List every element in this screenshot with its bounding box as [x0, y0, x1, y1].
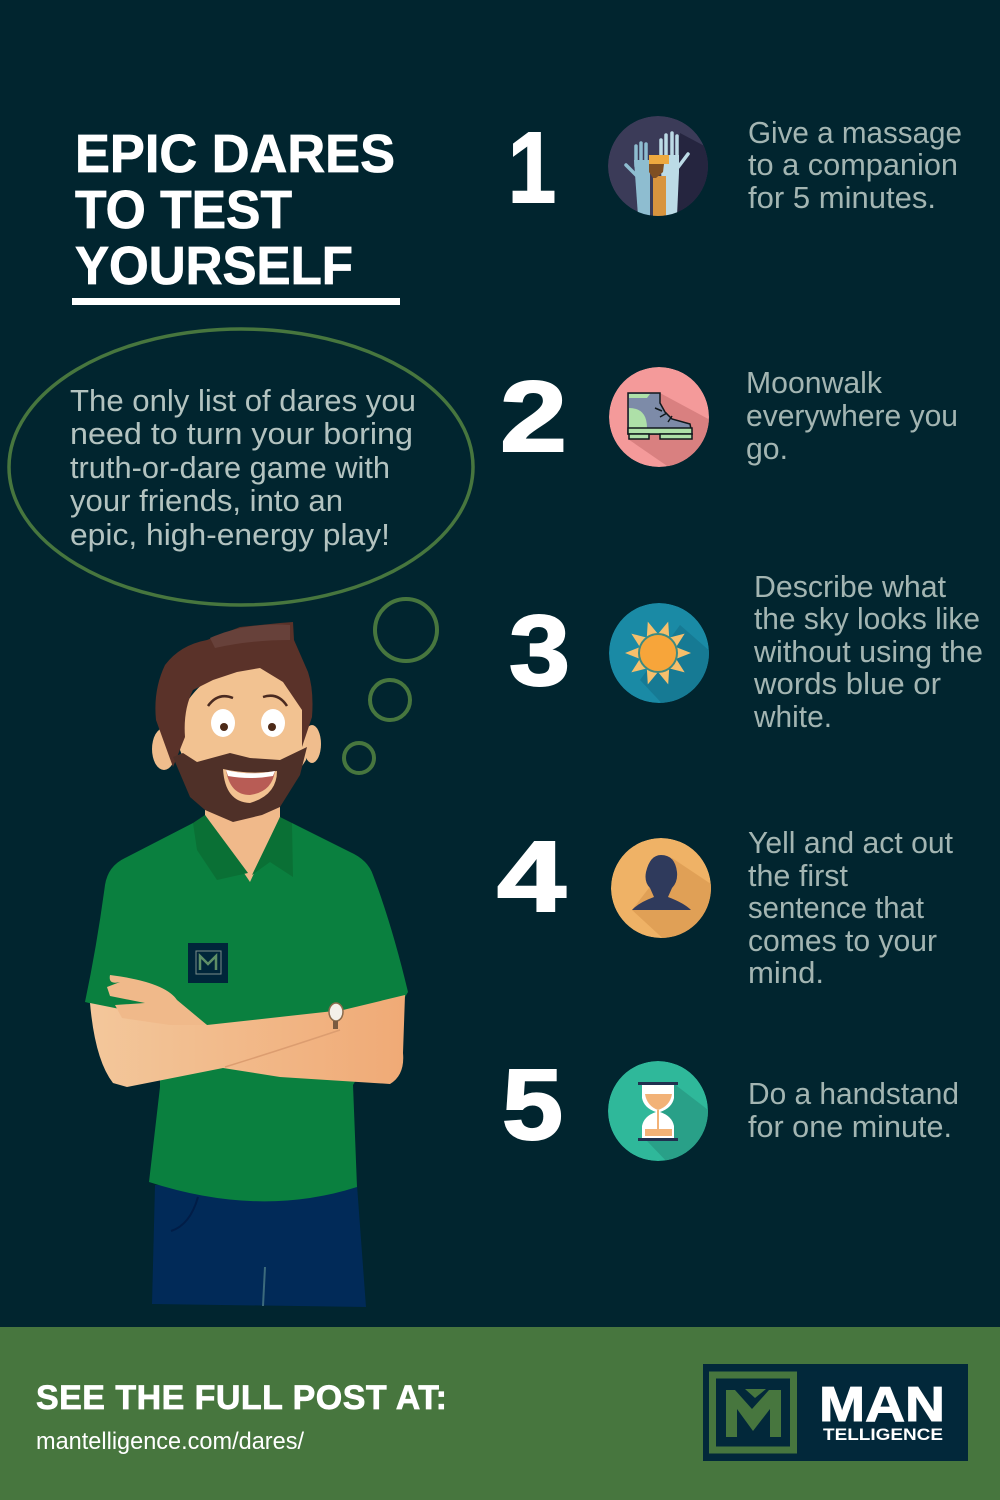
dare text 1: Give a massage	[748, 115, 962, 150]
dare 1	[512, 116, 961, 216]
number 4: 4	[497, 821, 566, 933]
logo: MAN	[819, 1378, 945, 1432]
dare text 3: Describe what	[754, 569, 946, 604]
number 3: 3	[509, 595, 570, 707]
dare text 2: go.	[746, 431, 788, 466]
number 5: 5	[502, 1049, 563, 1161]
dare text 4: sentence that	[748, 890, 924, 925]
footer banner	[0, 1327, 1000, 1500]
title: YOURSELF	[75, 236, 353, 296]
dare text 4	[748, 825, 953, 990]
dare text 2: Moonwalk	[746, 365, 882, 400]
dare text 3	[753, 569, 983, 734]
intro text: your friends, into an	[70, 483, 343, 518]
intro text: epic, high-energy play!	[70, 517, 390, 552]
icon: person silhouette	[611, 838, 711, 938]
dare 4	[497, 821, 953, 990]
logo	[703, 1364, 968, 1461]
dare text 2	[746, 365, 958, 466]
icon: hourglass	[608, 1061, 712, 1165]
dare text 3: white.	[753, 699, 832, 734]
dare text 4: comes to your	[748, 923, 937, 958]
icon: raised hands	[608, 116, 712, 222]
dare 5	[504, 1061, 958, 1161]
icon: sun	[609, 603, 709, 703]
intro text	[70, 383, 416, 552]
shirt badge	[188, 943, 228, 983]
number 2: 2	[500, 361, 567, 473]
logo: TELLIGENCE	[823, 1425, 943, 1444]
title underline	[72, 298, 400, 305]
title	[75, 124, 395, 296]
footer url: mantelligence.com/dares/	[36, 1428, 304, 1455]
intro text: truth-or-dare game with	[70, 450, 390, 485]
dare text 3: words blue or	[753, 666, 941, 701]
dare text 5	[748, 1076, 959, 1144]
dare 2	[502, 367, 956, 467]
dare text 3: the sky looks like	[754, 601, 980, 636]
dare text 2: everywhere you	[746, 398, 958, 433]
dare text 4: Yell and act out	[748, 825, 953, 860]
dare text 3: without using the	[753, 634, 983, 669]
title: EPIC DARES	[75, 124, 395, 184]
icon: boot	[609, 367, 712, 470]
title: TO TEST	[75, 180, 292, 240]
dare text 1: to a companion	[748, 147, 958, 182]
dare 3	[509, 569, 983, 734]
dare text 1: for 5 minutes.	[748, 180, 936, 215]
footer heading: SEE THE FULL POST AT:	[36, 1379, 447, 1417]
thought bubble	[9, 329, 473, 773]
intro text: need to turn your boring	[70, 416, 413, 451]
intro text: The only list of dares you	[70, 383, 416, 418]
dare text 4: mind.	[748, 955, 824, 990]
dare text 5: Do a handstand	[748, 1076, 959, 1111]
number 1: 1	[508, 112, 556, 224]
character illustration	[85, 622, 408, 1307]
dare text 5: for one minute.	[748, 1109, 952, 1144]
dare text 1	[748, 115, 962, 215]
dare text 4: the first	[748, 858, 848, 893]
